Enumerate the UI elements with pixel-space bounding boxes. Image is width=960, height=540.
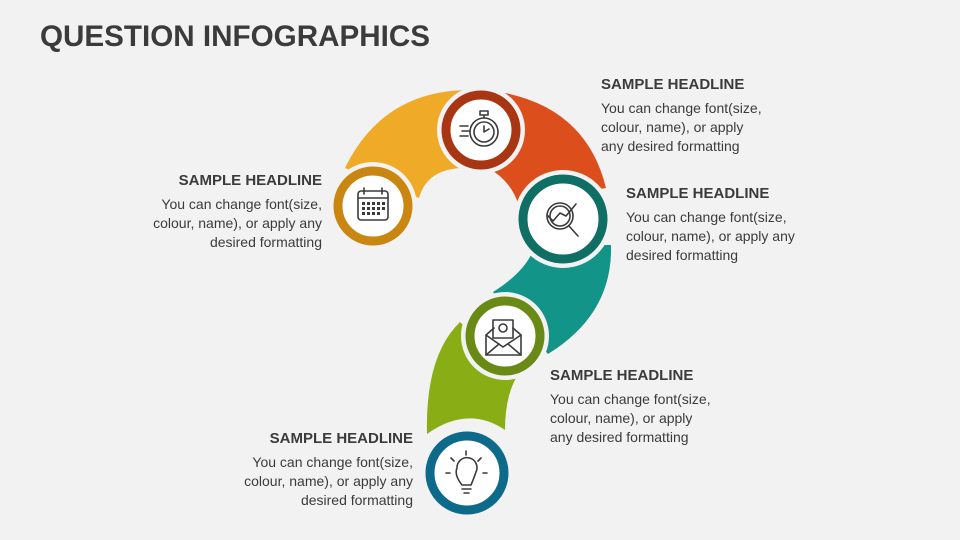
text block: left [153,172,322,250]
title: QUESTION INFOGRAPHICS [40,20,430,53]
text block: lower right: colour, name), or apply [550,410,692,426]
segment: orange [488,93,606,203]
text block: bottom left [244,430,413,508]
text block: top right [601,76,762,154]
text block: middle right: colour, name), or apply any [626,228,795,244]
text block: bottom left: colour, name), or apply any [244,473,413,489]
text block: middle right: desired formatting [626,247,738,263]
text block: lower right: You can change font(size, [550,391,711,407]
text block: bottom left: SAMPLE HEADLINE [270,430,413,447]
text block: top right: any desired formatting [601,138,740,154]
text block: middle right: You can change font(size, [626,209,787,225]
text block: top right: SAMPLE HEADLINE [601,76,744,93]
text block: middle right: SAMPLE HEADLINE [626,185,769,202]
text block: bottom left: desired formatting [301,492,413,508]
text block: lower right [550,367,711,445]
icon ring: envelope [461,292,549,380]
segment: teal [493,245,611,354]
icon ring: calendar [329,162,417,250]
icon ring: lightbulb [421,427,513,519]
text block: left: You can change font(size, [161,196,322,212]
text block: lower right: SAMPLE HEADLINE [550,367,693,384]
icon ring: search chart [514,170,612,268]
text block: left: SAMPLE HEADLINE [179,172,322,189]
text block: lower right: any desired formatting [550,429,689,445]
text block: bottom left: You can change font(size, [252,454,413,470]
icon ring: stopwatch [437,86,525,174]
text block: top right: colour, name), or apply [601,119,743,135]
text block: left: colour, name), or apply any [153,215,322,231]
text block: left: desired formatting [210,234,322,250]
segment: yellow [345,90,474,198]
text block: top right: You can change font(size, [601,100,762,116]
text block: middle right [626,185,795,263]
segment: green [427,322,516,434]
